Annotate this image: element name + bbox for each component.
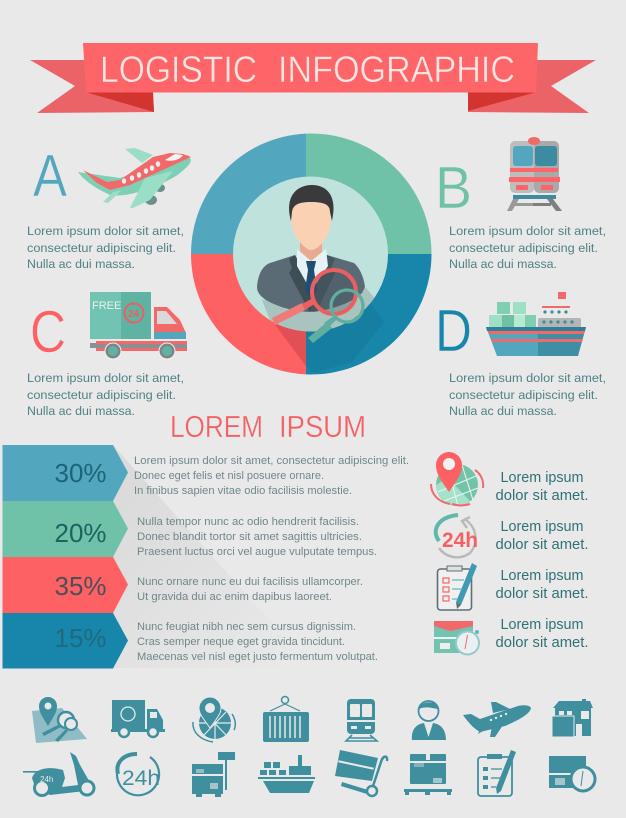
description 35% xyxy=(137,576,363,603)
text block C: Lorem ipsum dolor sit amet, xyxy=(27,371,184,385)
arrow 15%: 15% xyxy=(54,623,106,653)
icon: delivery truck xyxy=(90,292,187,359)
description 35%: Ut gravida dui ac enim dapibus laoreet. xyxy=(137,591,332,603)
section heading xyxy=(170,409,366,444)
description 20%: Praesent luctus orci vel augue vulputate tempus. xyxy=(137,546,377,558)
description 20% xyxy=(137,516,377,558)
title: LOGISTIC xyxy=(100,49,257,90)
text block B: Nulla ac dui massa. xyxy=(449,257,557,271)
letter D: D xyxy=(435,298,472,364)
arrow 30% xyxy=(2,445,128,501)
central donut chart xyxy=(191,133,432,375)
icon: parcel and stopwatch xyxy=(434,621,479,654)
icon: globe pin xyxy=(193,697,235,742)
icon: delivery truck: FREE xyxy=(92,300,121,312)
text block B xyxy=(449,224,606,271)
icon: 24h xyxy=(117,754,160,795)
text: checklist: Lorem ipsum xyxy=(500,568,584,584)
arrow 35% xyxy=(2,557,128,613)
icon: support agent xyxy=(412,701,446,740)
icon: clipboard and pencil xyxy=(438,563,477,610)
letter B: B xyxy=(435,155,472,221)
section heading: IPSUM xyxy=(279,409,366,444)
icon: train xyxy=(346,699,377,741)
person with magnifiers xyxy=(257,185,365,343)
description 30%: Donec eget felis et nisl posuere ornare. xyxy=(134,470,324,482)
icon: container xyxy=(263,696,309,742)
description 20%: Nulla tempor nunc ac odio hendrerit facilisis. xyxy=(137,516,359,528)
icon: map pin on globe xyxy=(431,452,483,506)
icon: scooter: 24h xyxy=(40,775,53,784)
text block B: Lorem ipsum dolor sit amet, xyxy=(449,224,606,238)
text block B: consectetur adipiscing elit. xyxy=(449,241,598,255)
description 20%: Donec blandit tortor sit amet sagittis ultricies. xyxy=(137,531,362,543)
text: 24h service: dolor sit amet. xyxy=(496,537,588,553)
arrow 15% xyxy=(2,613,128,668)
text block A: consectetur adipiscing elit. xyxy=(27,241,176,255)
icon: 24h phone: 24h xyxy=(442,529,478,552)
text: timed parcel: dolor sit amet. xyxy=(496,635,588,651)
arrow 35%: 35% xyxy=(54,571,106,601)
percentage arrows xyxy=(2,445,312,668)
icon: cargo ship xyxy=(486,292,586,356)
text: 24h service xyxy=(496,519,588,553)
icon: parcel scale xyxy=(192,752,235,797)
arrow 30%: 30% xyxy=(54,458,106,488)
text: timed parcel xyxy=(496,617,588,651)
text: location xyxy=(496,470,588,504)
text: location: dolor sit amet. xyxy=(496,488,588,504)
icon: 24h phone xyxy=(436,515,478,557)
icon: scooter xyxy=(23,752,94,796)
icon: clipboard xyxy=(478,750,516,796)
title xyxy=(100,49,515,90)
description 15% xyxy=(137,621,378,663)
text block C xyxy=(27,371,184,418)
icon: pallet box xyxy=(404,754,452,795)
text: checklist xyxy=(496,568,588,602)
description 15%: Maecenas vel nisl eget justo fermentum volutpat. xyxy=(137,651,378,663)
icon: parcel stopwatch xyxy=(549,756,595,791)
description 30% xyxy=(134,455,409,497)
letter C: C xyxy=(30,299,66,365)
description 15%: Nunc feugiat nibh nec sem cursus dignissim. xyxy=(137,621,356,633)
text block A: Lorem ipsum dolor sit amet, xyxy=(27,224,184,238)
text block A: Nulla ac dui massa. xyxy=(27,257,135,271)
text: 24h service: Lorem ipsum xyxy=(500,519,584,535)
text: location: Lorem ipsum xyxy=(500,470,584,486)
text block D: Lorem ipsum dolor sit amet, xyxy=(449,371,606,385)
text block C: consectetur adipiscing elit. xyxy=(27,388,176,402)
arrow 20% xyxy=(2,501,128,557)
description 15%: Cras semper neque eget gravida tincidunt. xyxy=(137,636,345,648)
title banner xyxy=(30,43,596,113)
text block D: Nulla ac dui massa. xyxy=(449,404,557,418)
icon: delivery truck: 24 xyxy=(128,309,140,320)
icon: hand truck xyxy=(335,750,387,796)
arrow 20%: 20% xyxy=(54,518,106,548)
text: timed parcel: Lorem ipsum xyxy=(500,617,584,633)
section heading: LOREM xyxy=(170,409,263,444)
description 30%: In finibus sapien vitae odio facilisis molestie. xyxy=(134,485,352,497)
letter A: A xyxy=(33,143,68,209)
icon: train xyxy=(507,137,562,211)
icon: airplane xyxy=(78,148,191,208)
bottom icon row xyxy=(23,696,595,797)
icon: ship xyxy=(258,755,315,793)
text block C: Nulla ac dui massa. xyxy=(27,404,135,418)
title: INFOGRAPHIC xyxy=(278,49,515,90)
description 35%: Nunc ornare nunc eu dui facilisis ullamcorper. xyxy=(137,576,363,588)
icon: box truck xyxy=(111,700,165,737)
icon: 24h: 24h xyxy=(122,767,160,790)
text block D xyxy=(449,371,606,418)
description 30%: Lorem ipsum dolor sit amet, consectetur adipiscing elit. xyxy=(134,455,409,467)
icon: airplane xyxy=(463,702,531,737)
text block A xyxy=(27,224,184,271)
icon: warehouse house xyxy=(552,699,593,737)
text: checklist: dolor sit amet. xyxy=(496,586,588,602)
icon: map search xyxy=(32,697,87,743)
text block D: consectetur adipiscing elit. xyxy=(449,388,598,402)
